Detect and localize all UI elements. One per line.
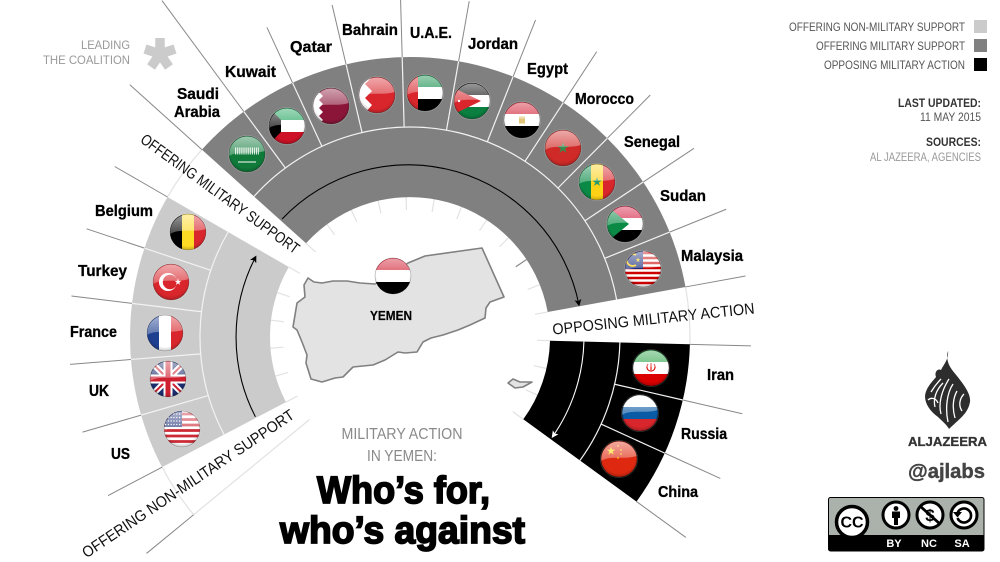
flag: Egypt <box>503 101 541 139</box>
flag: Malaysia <box>624 250 662 288</box>
title kicker: MILITARY ACTION <box>342 426 462 443</box>
label: UK: UK <box>89 383 109 400</box>
label: Kuwait: Kuwait <box>225 64 277 81</box>
panel: opposing military action sector <box>523 341 690 502</box>
panel: offering military support sector <box>202 57 686 312</box>
legend: OFFERING NON-MILITARY SUPPORT <box>789 20 966 34</box>
flag: US <box>163 410 201 448</box>
logo text: Al Jazeera: ALJAZEERA <box>908 434 988 449</box>
flag: France <box>146 314 184 352</box>
band label: opposing military action: OPPOSING MILITARY ACTION <box>552 300 755 339</box>
text: leading the coalition: THE COALITION <box>43 53 130 67</box>
badge: Creative Commons BY-NC-SA <box>828 498 984 551</box>
icon: non-commercial <box>917 502 943 528</box>
arrow: military support clockwise <box>282 165 579 305</box>
text: last updated: LAST UPDATED: <box>898 96 981 110</box>
text: last updated <box>898 96 981 124</box>
label: Egypt: Egypt <box>527 61 569 78</box>
flag: Qatar <box>312 87 350 125</box>
badge labels: NC <box>921 538 937 550</box>
flag: Iran <box>632 349 670 387</box>
label: Belgium: Belgium <box>95 203 153 220</box>
text: last updated: 11 MAY 2015 <box>920 110 981 124</box>
text: sources: SOURCES: <box>926 135 981 149</box>
label: Saudi Arabia: Saudi <box>177 86 219 103</box>
label: Saudi Arabia <box>174 86 220 121</box>
label: Morocco: Morocco <box>575 91 634 108</box>
text: leading the coalition <box>43 38 130 67</box>
flag: Kuwait <box>268 107 306 145</box>
arrow: opposing action downward <box>552 342 584 437</box>
label: France: France <box>70 324 117 341</box>
legend: OFFERING MILITARY SUPPORT <box>816 39 966 53</box>
label: Yemen: YEMEN <box>370 308 412 323</box>
flag: Turkey <box>152 263 190 301</box>
arrow: non-military support upward <box>236 257 256 417</box>
flag: Bahrain <box>358 76 396 114</box>
badge labels: SA <box>954 538 970 550</box>
title kicker <box>342 426 462 465</box>
label: Turkey: Turkey <box>78 263 127 280</box>
legend: OPPOSING MILITARY ACTION <box>824 58 965 72</box>
icon: attribution <box>883 502 909 528</box>
text: leading the coalition: LEADING <box>81 38 130 52</box>
icon: asterisk marking coalition leader <box>145 38 175 67</box>
logo: Al Jazeera calligraphic mark <box>925 351 970 429</box>
badge labels <box>886 538 970 550</box>
panel: offering non-military support sector <box>130 197 289 467</box>
map: Yemen <box>293 248 532 388</box>
icon: share alike <box>951 502 977 528</box>
title: Who’s for, <box>317 470 490 512</box>
text: sources <box>870 135 981 164</box>
band label: offering non-military support: OFFERING NON-MILITARY SUPPORT <box>79 406 298 562</box>
label: China: China <box>658 484 698 501</box>
label: Russia: Russia <box>681 426 727 443</box>
band label: offering military support: OFFERING MILITARY SUPPORT <box>137 131 303 258</box>
icon: non-commercial: $ <box>925 506 935 525</box>
flag: Yemen <box>374 257 412 295</box>
flag: China <box>600 440 638 478</box>
label: US: US <box>111 446 130 463</box>
legend <box>789 20 987 72</box>
title kicker: IN YEMEN: <box>367 448 437 465</box>
flag: Saudi Arabia <box>228 135 266 173</box>
label: Senegal: Senegal <box>624 134 680 151</box>
badge labels: BY <box>886 538 902 550</box>
label: Iran: Iran <box>707 367 734 384</box>
flag: Senegal <box>578 163 616 201</box>
flag: UK <box>149 360 187 398</box>
flag: UAE <box>406 74 444 112</box>
label: Saudi Arabia: Arabia <box>174 104 220 121</box>
flag: Jordan <box>453 82 491 120</box>
label: UAE: U.A.E. <box>410 25 452 42</box>
flag: Morocco <box>544 129 582 167</box>
icon: cc <box>836 506 868 538</box>
label: Bahrain: Bahrain <box>342 22 398 39</box>
label: Sudan: Sudan <box>660 188 706 205</box>
flag: Russia <box>621 394 659 432</box>
flag: Belgium <box>169 213 207 251</box>
handle: @ajlabs: @ajlabs <box>908 461 985 483</box>
label: Jordan: Jordan <box>468 36 518 53</box>
label: Malaysia: Malaysia <box>681 248 743 265</box>
flag: Sudan <box>606 205 644 243</box>
title <box>279 470 525 552</box>
label: Qatar: Qatar <box>290 39 332 56</box>
icon: cc: CC <box>840 514 864 532</box>
title: who’s against <box>279 510 525 552</box>
